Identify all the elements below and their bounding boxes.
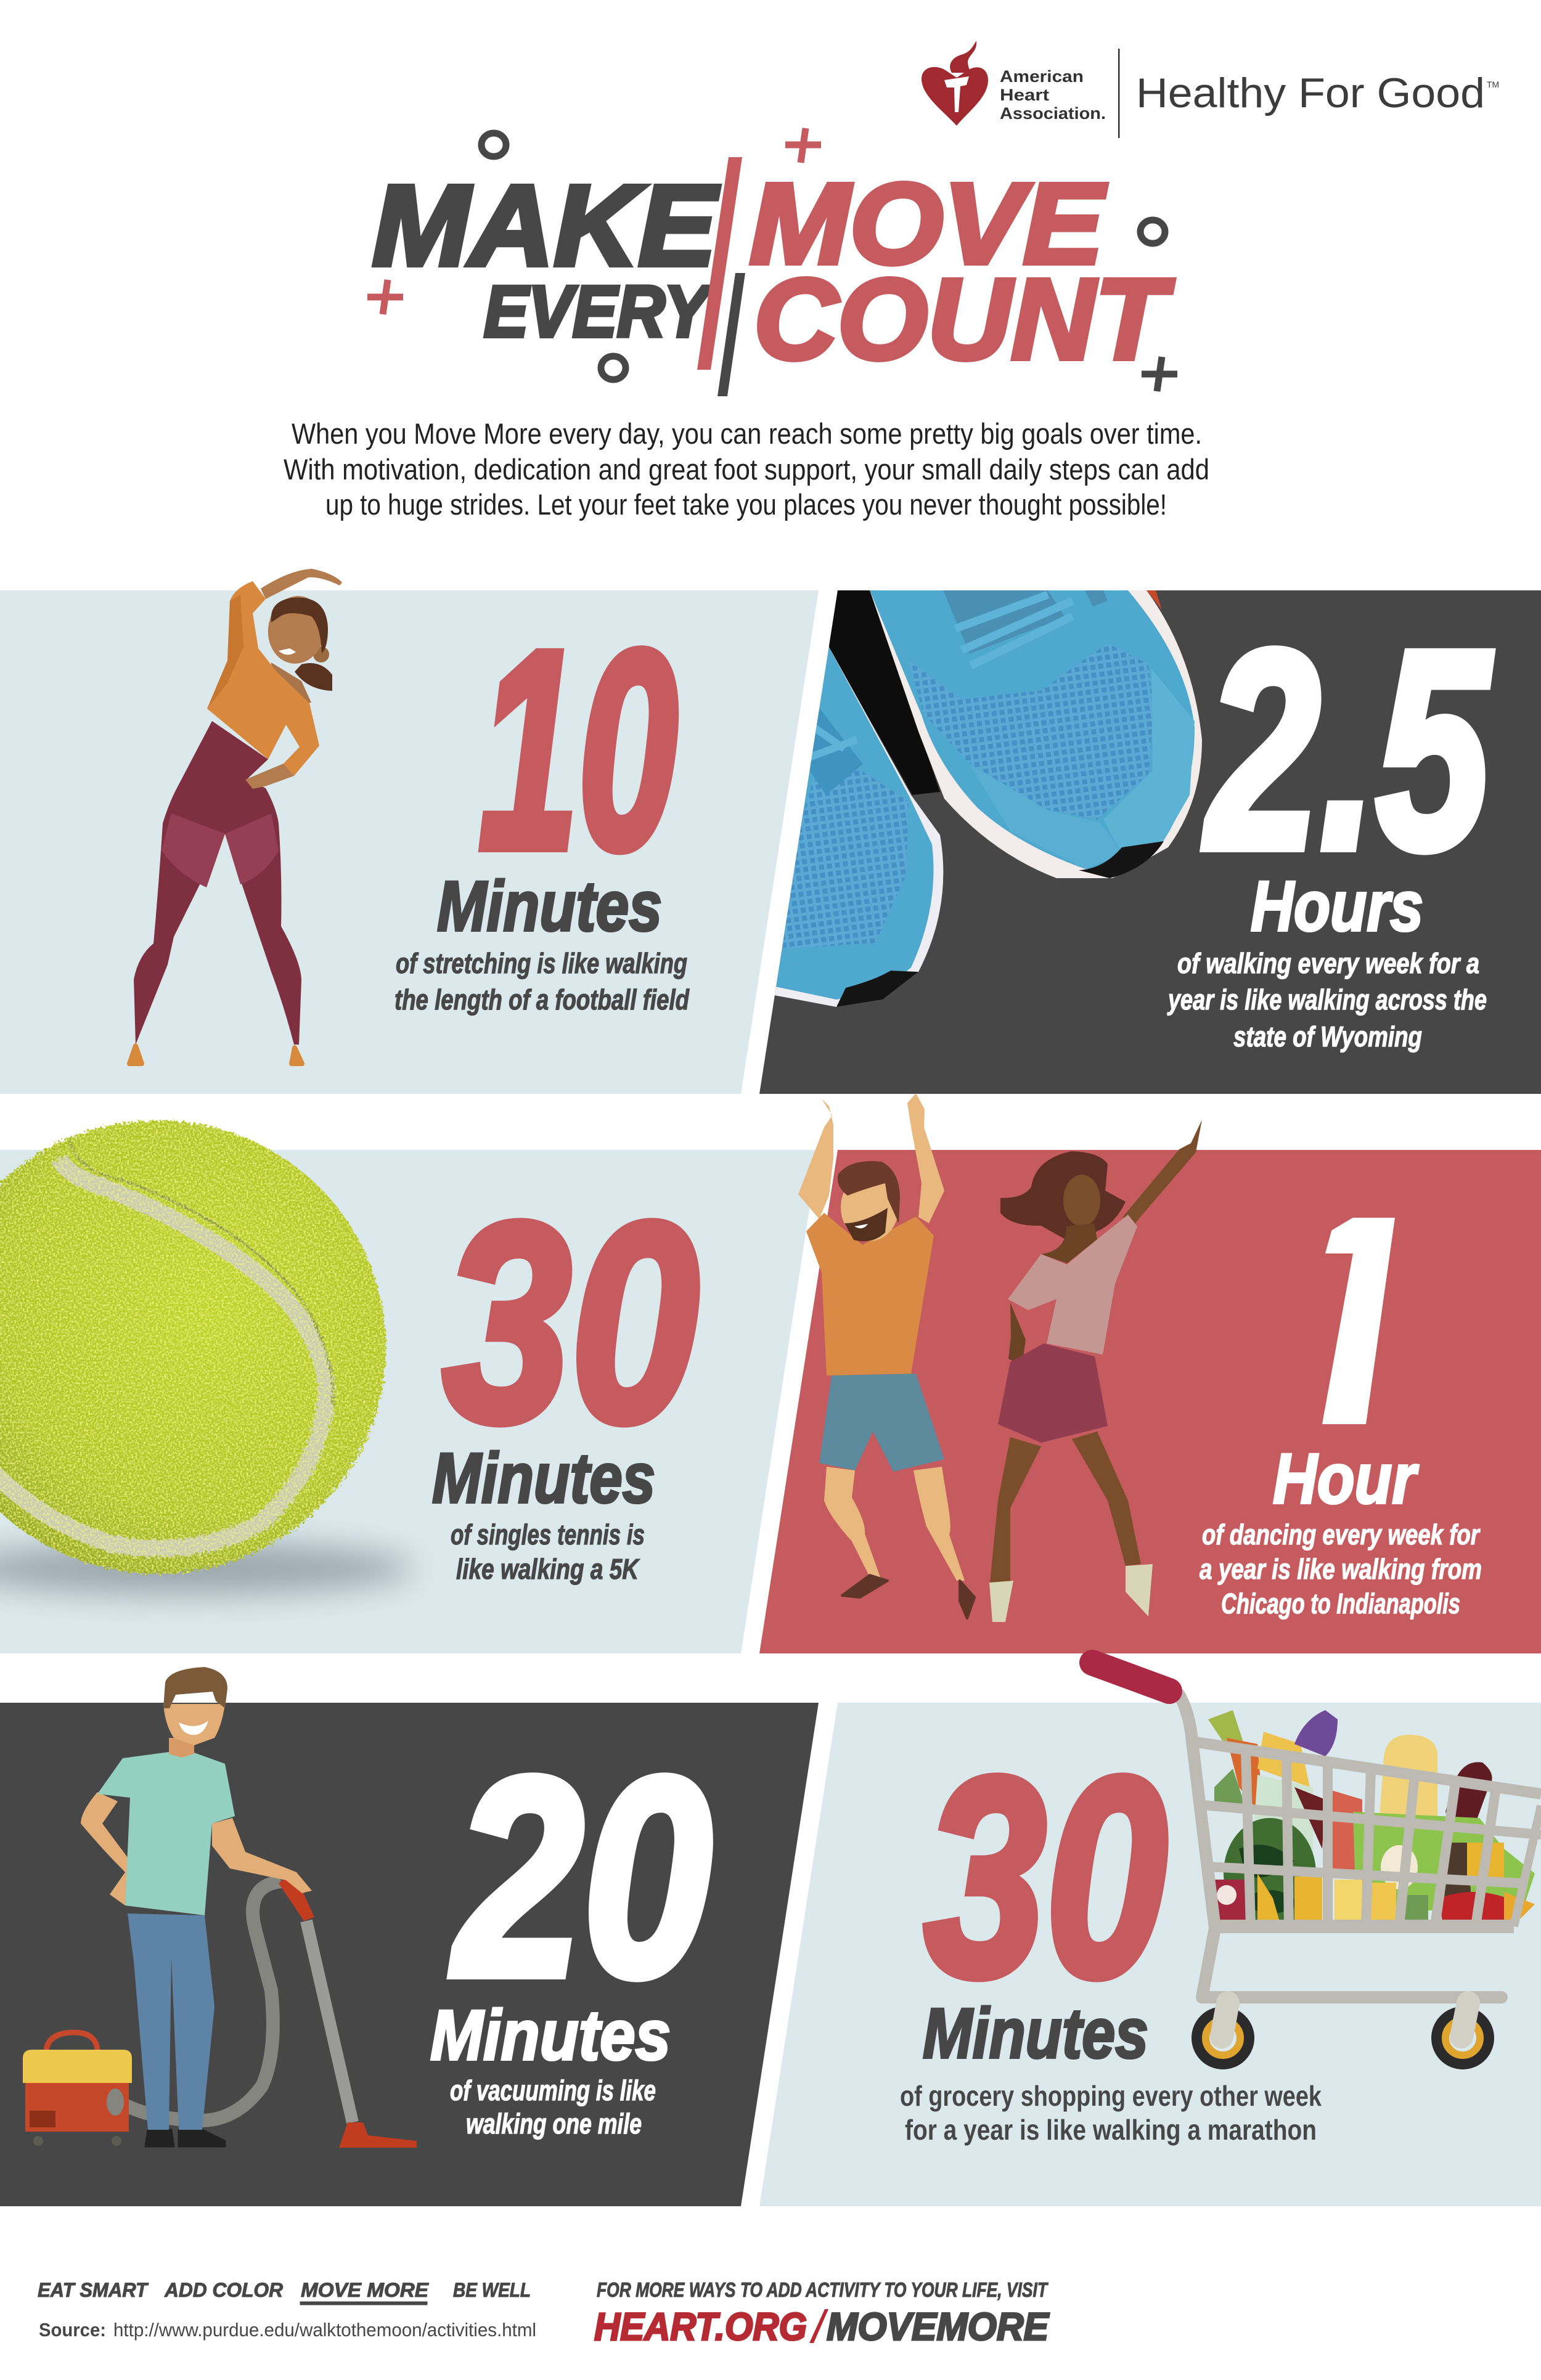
intro text: With motivation, dedication and great foot support, your small daily steps can add [284,453,1209,486]
footer: URL HEART.ORG/MOVEMORE [594,2305,1050,2349]
number: 1: 1 [1251,1164,1453,1480]
panel: dancing 1 hour [759,1093,1541,1653]
unit: Minutes: Minutes [432,1439,655,1518]
description [1200,1518,1482,1620]
illustration: shopping cart [1092,1663,1541,2064]
illustration: man with vacuum [23,1667,417,2148]
title: Make Every Move Count [367,128,1177,396]
unit: Minutes: Minutes [430,1996,671,2075]
unit: Minutes: Minutes [437,867,662,946]
description: like walking a 5K [456,1553,640,1585]
footer: call to action: FOR MORE WAYS TO ADD ACTIVITY TO YOUR LIFE, VISIT [597,2278,1048,2301]
description: state of Wyoming [1233,1021,1422,1053]
description: for a year is like walking a marathon [905,2114,1317,2146]
panel: vacuuming 20 minutes [0,1667,819,2206]
footer: pillars nav [38,2279,531,2305]
number: 30: 30 [443,1165,698,1480]
description [451,1518,645,1585]
title word: EVERY: EVERY [484,271,714,353]
description [900,2080,1322,2146]
description: the length of a football field [394,984,690,1016]
number: 20: 20 [451,1719,711,2035]
illustration: dancing woman [989,1120,1202,1622]
logo: American Heart Association + Healthy For Good [922,41,1499,138]
illustration: tennis ball [0,1120,413,1594]
photo: blue sneakers [758,590,1202,1007]
description: a year is like walking from [1200,1553,1482,1585]
panel: walking 2.5 hours [758,590,1541,1094]
footer: pillars nav: ADD COLOR [164,2279,283,2301]
footer: pillars nav: BE WELL [453,2279,531,2301]
cart frame [1179,1695,1541,1997]
title word: COUNT: COUNT [754,256,1174,383]
number: 30: 30 [925,1719,1167,2035]
decoration: rings [481,133,1165,380]
logo text: American Heart Association [1000,67,1106,123]
logo text: American Heart Association: Association. [1000,104,1106,123]
title word: MAKE: MAKE [372,162,719,290]
description: of grocery shopping every other week [900,2080,1322,2112]
intro text: When you Move More every day, you can reach some pretty big goals over time. [292,417,1202,450]
illustration: stretching woman [129,569,342,1064]
logo: American Heart Association + Healthy For Good: TM [1487,79,1499,89]
unit: Minutes: Minutes [923,1994,1148,2073]
small shoe [758,643,943,1007]
footer: pillars nav: MOVE MORE [301,2279,430,2301]
decoration: plus signs [367,128,1177,391]
intro text [284,417,1209,521]
footer: URL HEART.ORG/MOVEMORE: HEART.ORG [594,2305,807,2349]
description: of stretching is like walking [396,947,687,979]
description: of dancing every week for [1202,1518,1481,1551]
logo text: American Heart Association: Heart [1000,86,1049,104]
icon: heart and torch [922,41,988,126]
description [1167,947,1487,1053]
description: walking one mile [466,2108,642,2140]
title word: MOVE: MOVE [750,160,1106,288]
description: of walking every week for a [1177,947,1479,979]
unit: Hours: Hours [1251,867,1423,946]
big shoe [870,590,1202,878]
logo text: American Heart Association: American [1000,67,1084,86]
footer: URL HEART.ORG/MOVEMORE: MOVEMORE [827,2305,1050,2349]
panel: singles tennis 30 minutes [0,1120,819,1653]
footer: source: Source: [39,2319,106,2341]
footer: pillars nav: EAT SMART [38,2279,149,2301]
footer: source: http://www.purdue.edu/walktothemoon/activities.html [113,2319,536,2341]
unit: Hour: Hour [1273,1440,1419,1518]
description [394,947,690,1016]
number: 10: 10 [479,592,677,908]
panel: grocery shopping 30 minutes [759,1663,1541,2206]
description: Chicago to Indianapolis [1221,1587,1460,1620]
panel: stretching 10 minutes [0,569,819,1094]
illustration: dancing man [798,1093,975,1618]
logo text: Healthy For Good: Healthy For Good [1136,70,1485,116]
description: of vacuuming is like [450,2074,656,2106]
intro text: up to huge strides. Let your feet take you places you never thought possible! [325,488,1167,521]
description: of singles tennis is [451,1518,645,1551]
cart contents [1208,1710,1535,1929]
cart wheels [1197,2003,1489,2064]
description [450,2074,656,2140]
